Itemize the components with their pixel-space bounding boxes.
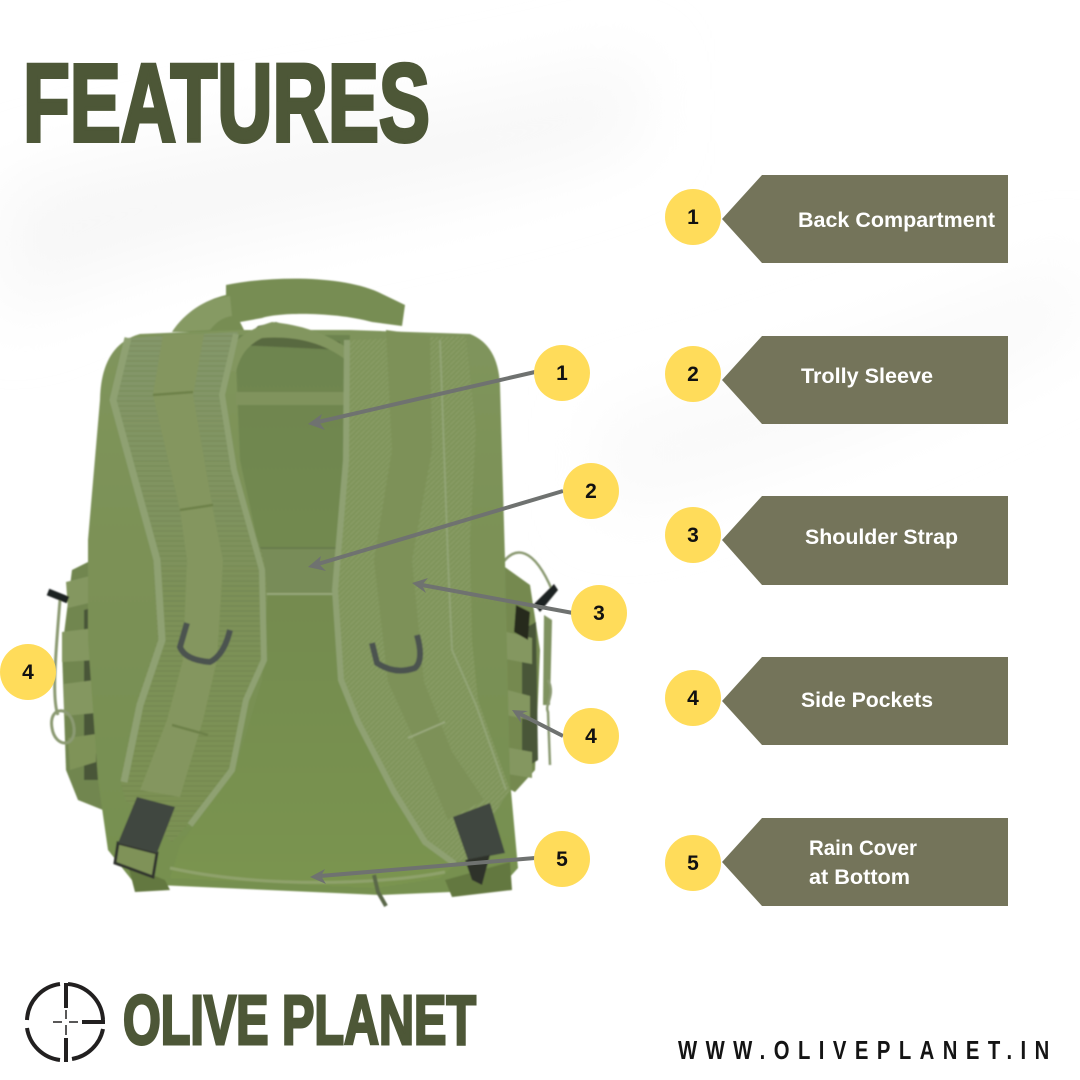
legend item 5: Rain Cover bbox=[809, 837, 917, 860]
marker 3 on backpack: 3 bbox=[593, 602, 605, 625]
legend item 5: 5 bbox=[687, 852, 699, 875]
marker 1 on backpack: 1 bbox=[556, 362, 568, 385]
left buckle bbox=[115, 797, 175, 877]
left side pockets bbox=[48, 556, 108, 812]
legend item 2 bbox=[665, 336, 1008, 424]
left strap webbing bbox=[140, 334, 223, 797]
legend item 2: Trolly Sleeve bbox=[801, 365, 933, 388]
zipper pull bbox=[374, 875, 386, 906]
arrow: callout 4 to side pocket bbox=[512, 710, 563, 736]
centre back panel bbox=[170, 335, 455, 888]
legend item 4 bbox=[665, 657, 1008, 745]
mesh top bbox=[238, 322, 342, 350]
marker 5 on backpack: 5 bbox=[556, 848, 568, 871]
legend item 1: Back Compartment bbox=[798, 209, 995, 232]
hanging loop bbox=[222, 322, 350, 372]
legend item 5 bbox=[665, 818, 1008, 906]
D-ring left bbox=[180, 623, 230, 662]
legend item 1 bbox=[665, 175, 1008, 263]
legend item 5: at Bottom bbox=[809, 866, 910, 889]
arrow: callout 5 to rain cover bbox=[310, 858, 535, 884]
left toggle bbox=[48, 592, 68, 600]
arrow: callout 2 to trolley sleeve bbox=[308, 491, 563, 571]
top carry handle bbox=[172, 279, 405, 332]
bottom zipper bbox=[170, 868, 445, 882]
backpack photo illustration bbox=[48, 279, 558, 906]
website url: WWW.OLIVEPLANET.IN bbox=[678, 1036, 1049, 1065]
title: FEATURES bbox=[23, 42, 430, 165]
legend item 3: 3 bbox=[687, 524, 699, 547]
left shoulder strap bbox=[113, 332, 267, 842]
legend item 3: Shoulder Strap bbox=[805, 526, 958, 549]
marker 3 on backpack bbox=[571, 585, 627, 641]
right shoulder strap bbox=[333, 330, 510, 864]
right strap webbing bbox=[374, 330, 484, 820]
marker 5 on backpack bbox=[534, 831, 590, 887]
marker 2 on backpack bbox=[563, 463, 619, 519]
D-ring right bbox=[372, 635, 420, 671]
marker 1 on backpack bbox=[534, 345, 590, 401]
legend item 1: 1 bbox=[687, 206, 699, 229]
back compartment seam bbox=[236, 392, 348, 405]
marker 4 on backpack left bbox=[0, 644, 56, 700]
marker 4 on backpack right: 4 bbox=[585, 725, 597, 748]
logo icon: crosshair bbox=[27, 983, 105, 1062]
trolley sleeve band bbox=[232, 547, 350, 595]
marker 4 on backpack right bbox=[563, 708, 619, 764]
legend item 2: 2 bbox=[687, 363, 699, 386]
legend item 4: Side Pockets bbox=[801, 689, 933, 712]
main body bbox=[88, 330, 518, 895]
right side pockets bbox=[462, 553, 558, 792]
marker 4 on backpack left: 4 bbox=[22, 661, 34, 684]
bottom feet bbox=[128, 862, 512, 897]
right buckle bbox=[453, 803, 505, 885]
legend item 3 bbox=[665, 496, 1008, 585]
legend item 4: 4 bbox=[687, 687, 699, 710]
marker 2 on backpack: 2 bbox=[585, 480, 597, 503]
arrow: callout 3 to shoulder strap bbox=[412, 578, 573, 613]
logo wordmark: OLIVE PLANET bbox=[123, 981, 476, 1059]
arrow: callout 1 to back compartment bbox=[308, 372, 535, 430]
